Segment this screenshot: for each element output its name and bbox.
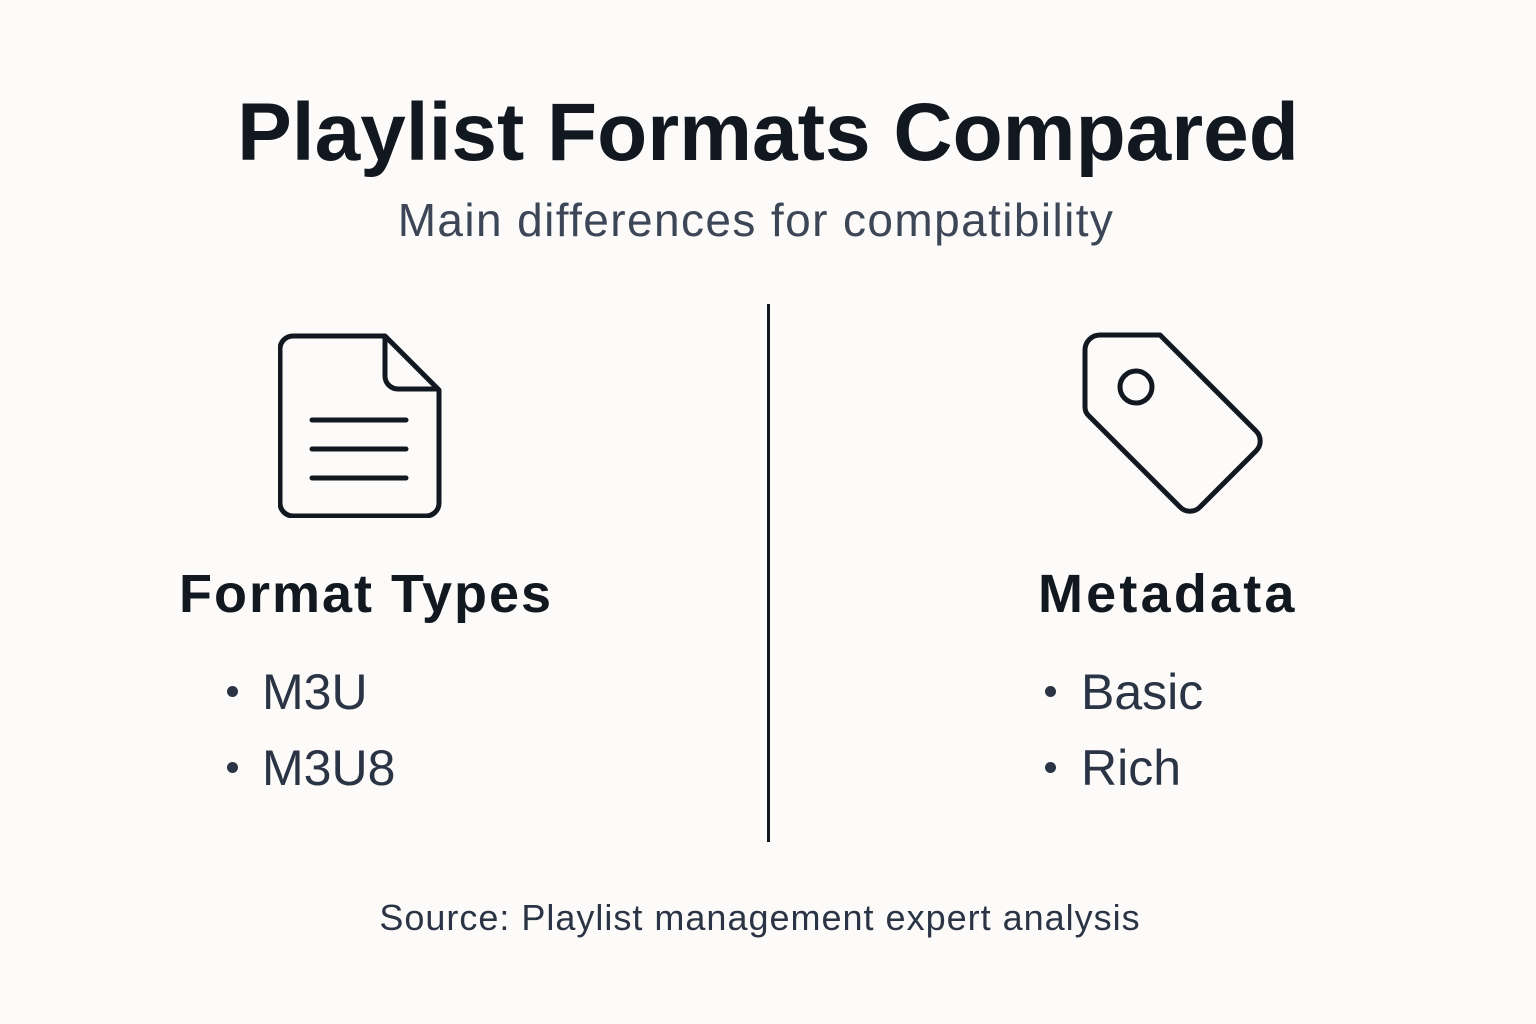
list: formats: M3U <box>262 664 368 720</box>
list: metadata levels <box>1045 664 1203 796</box>
panel: format types <box>179 334 553 796</box>
list: metadata levels: Rich <box>1081 740 1181 796</box>
icon: document <box>278 334 442 518</box>
title: Playlist Formats Compared <box>237 87 1299 178</box>
divider <box>767 304 770 842</box>
list: formats <box>227 664 395 796</box>
heading: Metadata: Metadata <box>1038 564 1298 624</box>
panel: metadata <box>1038 332 1298 796</box>
icon: tag <box>1082 332 1263 514</box>
list: metadata levels: Basic <box>1081 664 1203 720</box>
list: formats: M3U8 <box>262 740 395 796</box>
subtitle: Main differences for compatibility <box>398 194 1114 246</box>
source note: Source: Playlist management expert analysis <box>379 897 1141 938</box>
heading: Format Types: Format Types <box>179 564 553 624</box>
